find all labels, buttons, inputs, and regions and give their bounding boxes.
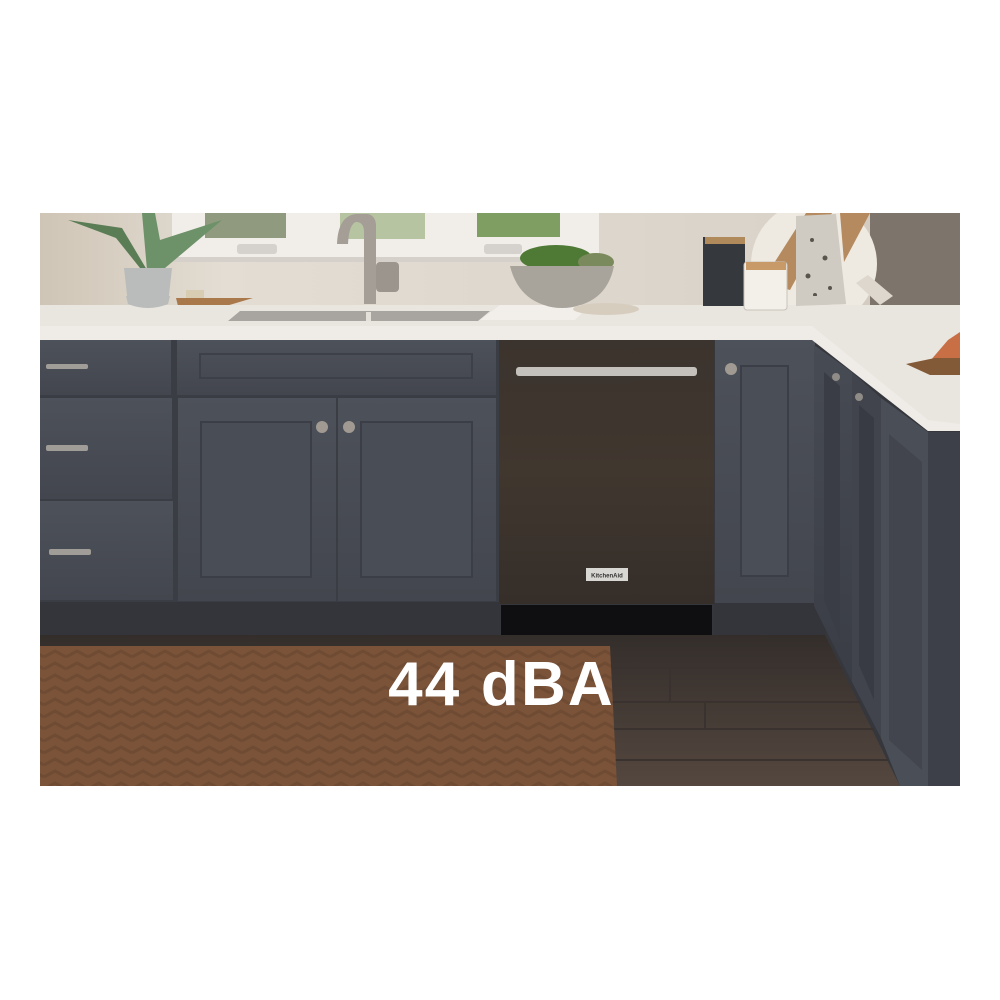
bowl with greens (510, 245, 614, 308)
dishwasher kick plate (501, 605, 712, 635)
drawer: top left (40, 340, 171, 395)
floor planks (612, 668, 888, 760)
countertop front edge (40, 339, 960, 431)
window (172, 213, 599, 262)
countertop (40, 305, 960, 431)
plant in pot (68, 213, 222, 308)
sink (228, 311, 490, 321)
dishwasher handle (516, 367, 697, 376)
round boards (751, 213, 893, 305)
dark wall section (870, 213, 960, 305)
scene base (500, 340, 960, 786)
wall (40, 213, 870, 305)
side cabinets (814, 345, 960, 786)
rug (40, 646, 617, 786)
dishwasher (499, 339, 714, 635)
toe kick (40, 602, 500, 607)
cabinet door left (178, 398, 336, 601)
speckled stone board (796, 214, 846, 306)
cabinet door right (338, 398, 496, 601)
sink false drawer (177, 340, 496, 395)
cabinet run (40, 339, 500, 607)
bowl base over counter (542, 304, 580, 308)
cutting board with carrots (906, 332, 960, 375)
drawer: middle left (40, 398, 172, 499)
floor (40, 635, 900, 786)
noise level label: 44 dBA (388, 650, 615, 719)
dishwasher badge (586, 568, 628, 581)
towel and plate (480, 303, 639, 320)
dishwasher badge: KitchenAid (591, 574, 623, 580)
cutting board small (176, 290, 253, 306)
drawer: bottom left (40, 501, 173, 600)
cabinet right of dishwasher (715, 340, 815, 603)
pot base and stone board base over counter (126, 296, 846, 308)
canisters (703, 237, 787, 310)
faucet (337, 214, 399, 304)
kitchen photo scene (40, 201, 960, 786)
